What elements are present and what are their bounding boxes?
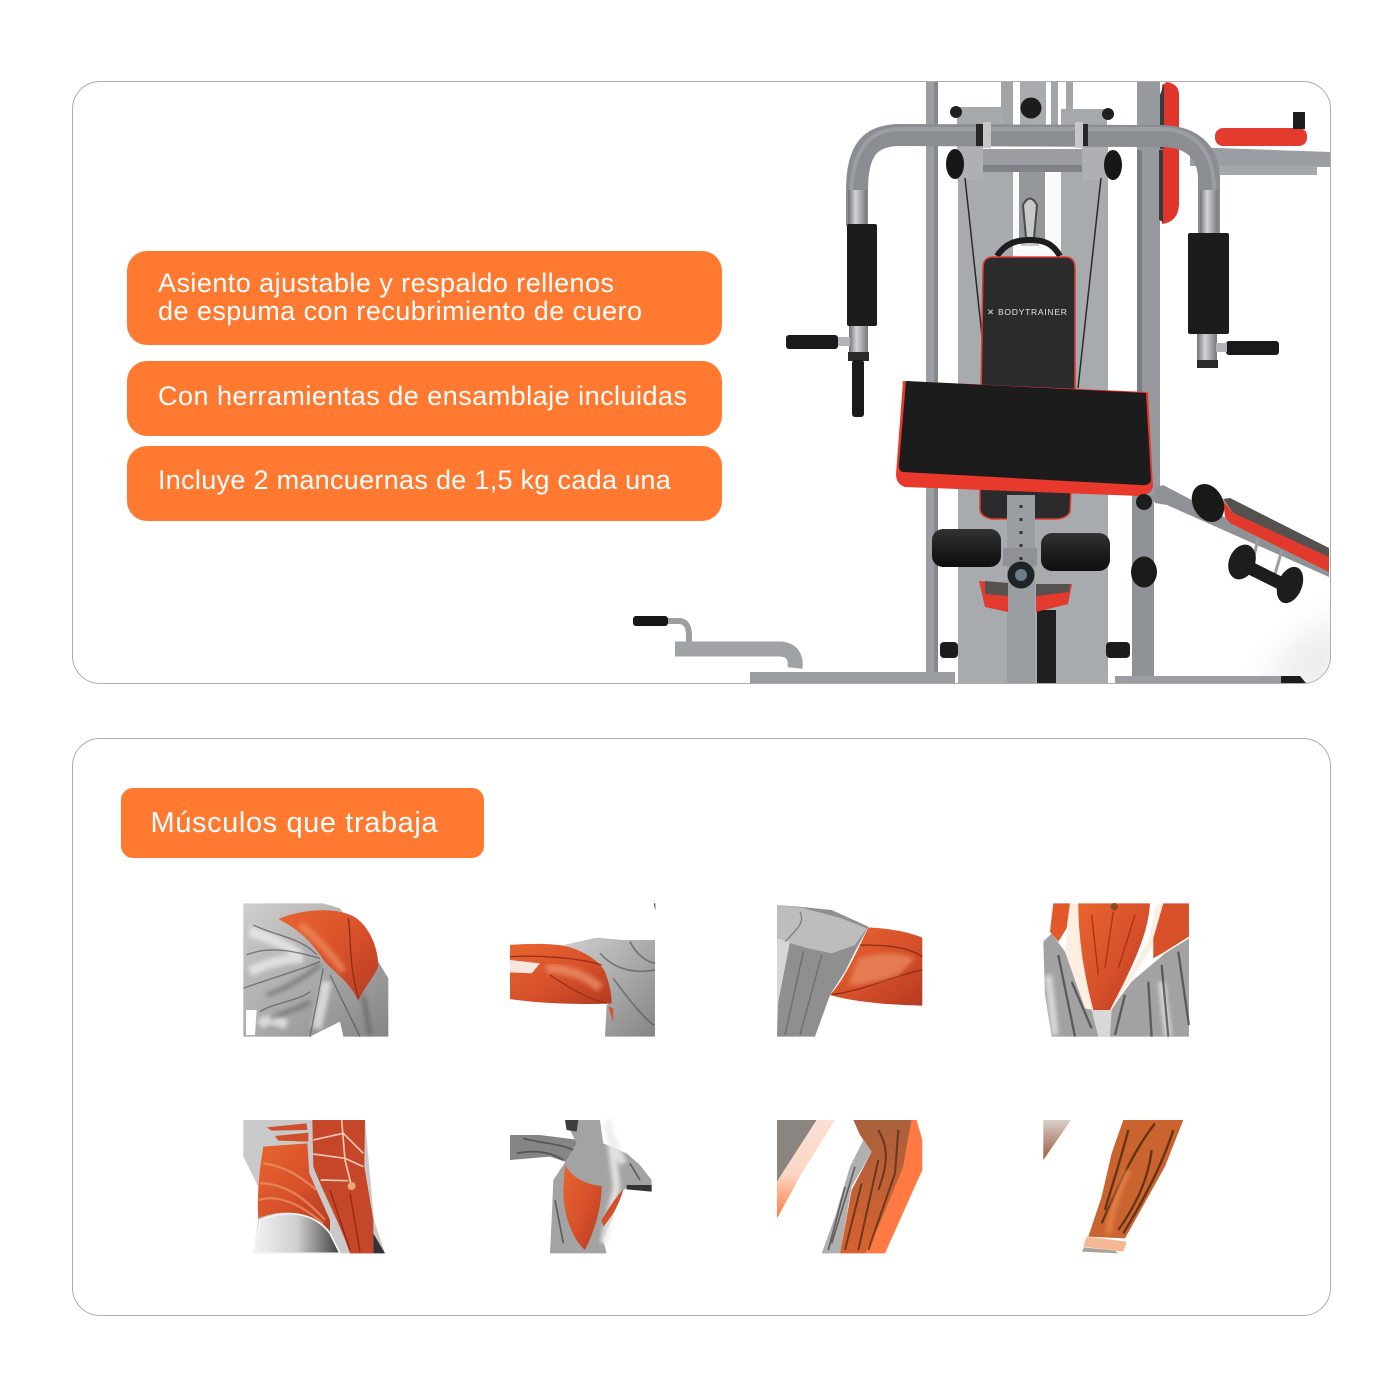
floor leg press bar: [632, 616, 1306, 682]
cable hook: [996, 198, 1060, 256]
right-side red pad and pull bar: [1158, 82, 1330, 224]
callout: seat and backrest: [126, 250, 722, 344]
rear frame and columns: [926, 82, 1160, 684]
callout: seat and backrest: de espuma con recubrimiento de cuero: [158, 296, 642, 326]
muscle: deltoid: [243, 903, 388, 1036]
panel: muscles worked: [72, 738, 1330, 1316]
right hand grip: [1188, 232, 1278, 368]
top pulley bracket: [946, 97, 1122, 388]
muscle: chest and abs upper: [1043, 902, 1188, 1036]
callout: tools included: [126, 360, 722, 436]
muscle: biceps: [776, 904, 922, 1036]
press arms: [848, 122, 1218, 234]
heading: [120, 788, 484, 858]
muscle: triceps side: [509, 903, 655, 1036]
left hand grip: [786, 224, 876, 416]
panel: machine features: [72, 81, 1330, 684]
callout: dumbbells included: Incluye 2 mancuernas de 1,5 kg cada una: [158, 465, 671, 495]
heading: Músculos que trabaja: [150, 806, 438, 838]
brand text: ✕ BODYTRAINER: [986, 306, 1067, 316]
muscle: latissimus back: [509, 1119, 651, 1253]
callout: seat and backrest: Asiento ajustable y respaldo rellenos: [158, 268, 614, 298]
muscle: forearm outer: [1043, 1119, 1183, 1253]
incline bench and dumbbells: [1130, 478, 1328, 607]
back rest with brand: [980, 256, 1074, 518]
muscle: forearm inner: [776, 1119, 922, 1253]
preacher pad: [896, 380, 1152, 496]
callout: dumbbells included: [126, 446, 722, 520]
muscle: obliques and abs: [243, 1119, 384, 1253]
central post and leg rollers: [932, 494, 1110, 684]
callout: tools included: Con herramientas de ensamblaje incluidas: [158, 381, 687, 411]
